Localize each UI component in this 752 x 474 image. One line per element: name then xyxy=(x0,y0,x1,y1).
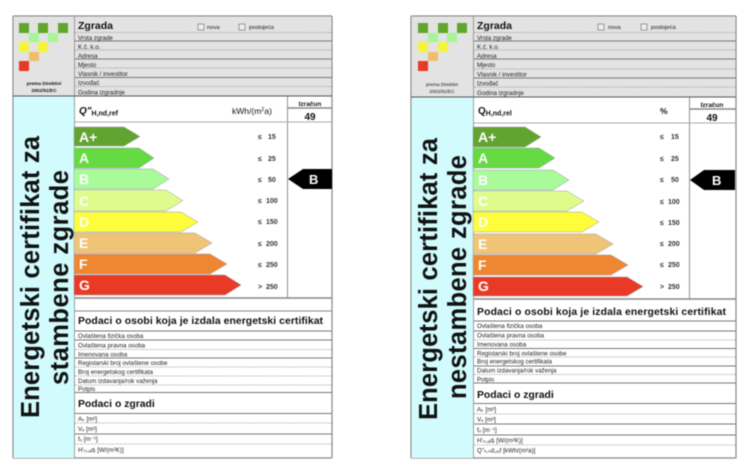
logo caption: 2002/91/EC xyxy=(429,89,455,95)
building field rows xyxy=(13,32,332,96)
class limits: 100 xyxy=(266,198,278,205)
building data section: fₒ [m⁻¹] xyxy=(78,436,98,443)
building data section: Podaci o zgradi xyxy=(477,390,554,401)
result marker B: B xyxy=(712,173,721,188)
building field rows: Vlasnik / investitor xyxy=(477,72,527,78)
certifier section: Ovlaštena pravna osoba xyxy=(78,342,146,350)
class limits: ≤ xyxy=(660,177,664,184)
building data section: Q"ₕ,ₙd,ᵣₑf [kWh/(m²a)] xyxy=(477,448,536,454)
certifier section: Potpis xyxy=(477,376,494,384)
class limits: 100 xyxy=(668,199,680,206)
energy class letters: A+ xyxy=(478,129,496,145)
class limits: 250 xyxy=(668,284,680,291)
class limits: ≤ xyxy=(258,134,262,141)
class limits: 50 xyxy=(268,177,276,184)
energy class letters: G xyxy=(478,278,489,294)
sidebar xyxy=(14,96,74,458)
logo caption xyxy=(27,81,61,94)
logo caption xyxy=(426,82,458,95)
energy class letters: F xyxy=(79,256,88,272)
building field rows: Godina izgradnje xyxy=(477,90,524,97)
energy class letters: A xyxy=(79,150,89,166)
indicator label xyxy=(79,106,119,118)
certifier section: Datum izdavanja/rok važenja xyxy=(78,378,158,385)
building data section: H'ₜᵣ,ₐdⱼ [W/(m²K)] xyxy=(477,438,523,444)
energy class letters: F xyxy=(478,257,487,273)
indicator label xyxy=(478,106,512,118)
energy class arrows xyxy=(74,127,241,295)
building data section: fₒ [m⁻¹] xyxy=(477,427,497,434)
unit label: a) xyxy=(264,106,272,116)
building data section: Vₑ [m³] xyxy=(477,416,496,424)
building field rows: Adresa xyxy=(78,53,98,60)
class limits: ≤ xyxy=(258,262,262,269)
building header: postojeća xyxy=(249,25,275,31)
class limits: 250 xyxy=(266,284,278,291)
building field rows: Adresa xyxy=(477,53,497,60)
class limits: ≤ xyxy=(660,220,664,227)
building field rows: Vrsta zgrade xyxy=(477,35,512,42)
building field rows: Vlasnik / investitor xyxy=(78,71,128,78)
class limits xyxy=(660,134,680,291)
certifier section: Imenovana osoba xyxy=(477,342,527,348)
indicator label: H,nd,ref xyxy=(92,110,119,118)
building header: Zgrada xyxy=(477,20,512,32)
class limits: ≤ xyxy=(258,198,262,205)
building field rows: K.č. k.o. xyxy=(477,44,500,51)
panel header background xyxy=(14,16,332,96)
certifier section: Ovlaštena pravna osoba xyxy=(477,332,545,340)
logo caption: 2002/91/EC xyxy=(31,88,57,94)
class limits: > xyxy=(660,284,664,291)
calculated value: 49 xyxy=(304,112,316,123)
class limits: 15 xyxy=(671,134,679,141)
energy class letters: G xyxy=(79,277,90,293)
class limits: > xyxy=(258,284,262,291)
certifier section: Broj energetskog certifikata xyxy=(477,358,553,366)
energy class letters: B xyxy=(478,172,488,188)
energy class letters xyxy=(79,129,97,293)
icon: directive logo squares xyxy=(19,23,68,71)
building data section: Aₖ [m²] xyxy=(477,406,496,414)
building field rows: Izvođač xyxy=(78,80,99,87)
energy class letters: D xyxy=(478,214,488,230)
certifier section: Broj energetskog certifikata xyxy=(78,369,154,376)
building header: postojeća xyxy=(651,25,677,31)
unit label: % xyxy=(660,106,668,116)
panel: residential building certificate xyxy=(13,16,332,458)
class limits: ≤ xyxy=(660,199,664,206)
energy class letters: C xyxy=(79,193,89,209)
class limits: ≤ xyxy=(258,241,262,248)
building field rows: Izvođač xyxy=(477,80,498,88)
sidebar title: nestambene zgrade xyxy=(444,155,472,399)
class limits: 250 xyxy=(266,262,278,269)
class limits: ≤ xyxy=(258,177,262,184)
unit label: kWh/(m xyxy=(232,106,261,116)
certifier section: Podaci o osobi koja je izdala energetski certifikat xyxy=(477,307,727,318)
class limits: 250 xyxy=(668,262,680,269)
icon: directive logo squares xyxy=(418,23,467,71)
certifier section: Registarski broj ovlaštene osobe xyxy=(78,360,168,367)
energy class letters: A xyxy=(478,150,488,166)
panel header background xyxy=(412,16,736,96)
class limits: ≤ xyxy=(258,219,262,226)
building header: nova xyxy=(207,25,220,31)
class limits: 25 xyxy=(268,156,276,163)
class limits: 15 xyxy=(268,134,276,141)
calculated value xyxy=(287,96,332,298)
indicator label: H,nd,rel xyxy=(486,110,512,118)
building data section xyxy=(474,390,736,454)
building field rows: Mjesto xyxy=(477,62,496,69)
building header: Zgrada xyxy=(78,20,113,32)
certifier section: Datum izdavanja/rok važenja xyxy=(477,368,557,374)
energy class letters: C xyxy=(478,193,488,209)
certifier section xyxy=(474,299,736,384)
calculated value: Izračun xyxy=(701,102,723,109)
building field rows: Godina izgradnje xyxy=(78,90,125,96)
building header: nova xyxy=(608,25,621,31)
building header xyxy=(78,20,275,32)
calculated value xyxy=(689,97,736,299)
energy class letters: D xyxy=(79,214,89,230)
certifier section: Potpis xyxy=(78,386,95,393)
indicator label: Q" xyxy=(79,106,92,117)
calculated value: 49 xyxy=(706,113,718,124)
building data section xyxy=(75,399,332,454)
class limits: ≤ xyxy=(660,262,664,269)
class limits: 50 xyxy=(671,177,679,184)
class limits: 25 xyxy=(671,156,679,163)
sidebar title xyxy=(415,137,472,420)
sidebar title: Energetski certifikat za xyxy=(415,137,443,420)
result marker B xyxy=(690,170,735,190)
result marker B xyxy=(288,169,332,189)
building data section: Podaci o zgradi xyxy=(78,399,155,410)
certifier section: Registarski broj ovlaštene osobe xyxy=(477,350,567,358)
building field rows: K.č. k.o. xyxy=(78,44,101,51)
class limits: 200 xyxy=(266,241,278,248)
energy class letters xyxy=(478,129,496,294)
building header xyxy=(477,20,677,32)
building field rows xyxy=(411,32,736,97)
class limits: 150 xyxy=(266,219,278,226)
indicator label: Q xyxy=(478,106,486,117)
class limits: 200 xyxy=(668,241,680,248)
sidebar title: stambene zgrade xyxy=(46,170,74,385)
class limits: ≤ xyxy=(660,241,664,248)
class limits: 150 xyxy=(668,220,680,227)
energy class letters: E xyxy=(79,235,88,251)
building field rows: Mjesto xyxy=(78,62,97,69)
certifier section: Podaci o osobi koja je izdala energetski certifikat xyxy=(78,316,324,327)
sidebar title: Energetski certifikat za xyxy=(17,135,45,418)
building data section: Vₑ [m³] xyxy=(78,426,97,433)
class limits xyxy=(258,134,278,291)
certifier section: Ovlaštena fizička osoba xyxy=(477,323,543,330)
certifier section: Imenovana osoba xyxy=(78,352,128,358)
certifier section xyxy=(75,298,332,393)
logo caption: prema Direktivi xyxy=(426,82,458,88)
certifier section: Ovlaštena fizička osoba xyxy=(78,333,144,340)
energy class letters: B xyxy=(79,171,89,187)
sidebar title xyxy=(17,135,74,418)
building field rows: Vrsta zgrade xyxy=(78,35,113,42)
energy class arrows xyxy=(473,127,643,296)
result marker B: B xyxy=(309,172,318,187)
energy class letters: A+ xyxy=(79,129,97,145)
calculated value: Izračun xyxy=(299,101,321,108)
class limits: ≤ xyxy=(660,134,664,141)
energy class letters: E xyxy=(478,236,487,252)
building data section: Aₖ [m²] xyxy=(78,416,97,423)
unit label: 2 xyxy=(261,107,264,113)
panel: non-residential building certificate xyxy=(411,16,736,458)
sidebar xyxy=(412,97,473,458)
class limits: ≤ xyxy=(258,156,262,163)
building data section: H'ₜᵣ,ₐdⱼ [W/(m²K)] xyxy=(78,447,124,454)
logo caption: prema Direktivi xyxy=(27,81,61,87)
class limits: ≤ xyxy=(660,156,664,163)
